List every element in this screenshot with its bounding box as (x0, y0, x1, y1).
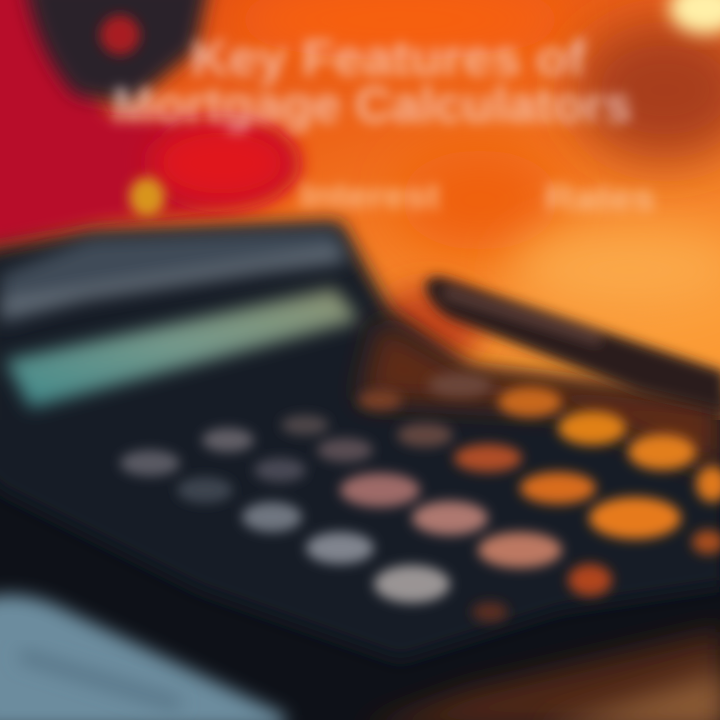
icon: bright light spot (669, 0, 720, 34)
subtitle text: Rates (545, 177, 655, 218)
paper at bottom left (0, 595, 285, 720)
calculator keys (120, 373, 720, 622)
dark dial with red button (25, 0, 210, 105)
warm reflection on calculator (360, 320, 720, 470)
key row: grey and pink keys (120, 373, 562, 603)
yellow spot (129, 177, 165, 217)
calculator body (0, 222, 720, 660)
subtitle text (300, 175, 655, 218)
key row: orange keys (454, 387, 720, 622)
calculator top bar (0, 228, 350, 325)
red object (0, 0, 298, 248)
wooden table at bottom right (360, 630, 720, 720)
title text: Key Features of (190, 30, 586, 86)
subtitle text: Interest (300, 175, 440, 216)
title text: Mortgage Calculators (112, 77, 632, 133)
pen (425, 277, 720, 412)
title text (112, 30, 632, 133)
calculator display (5, 288, 360, 408)
